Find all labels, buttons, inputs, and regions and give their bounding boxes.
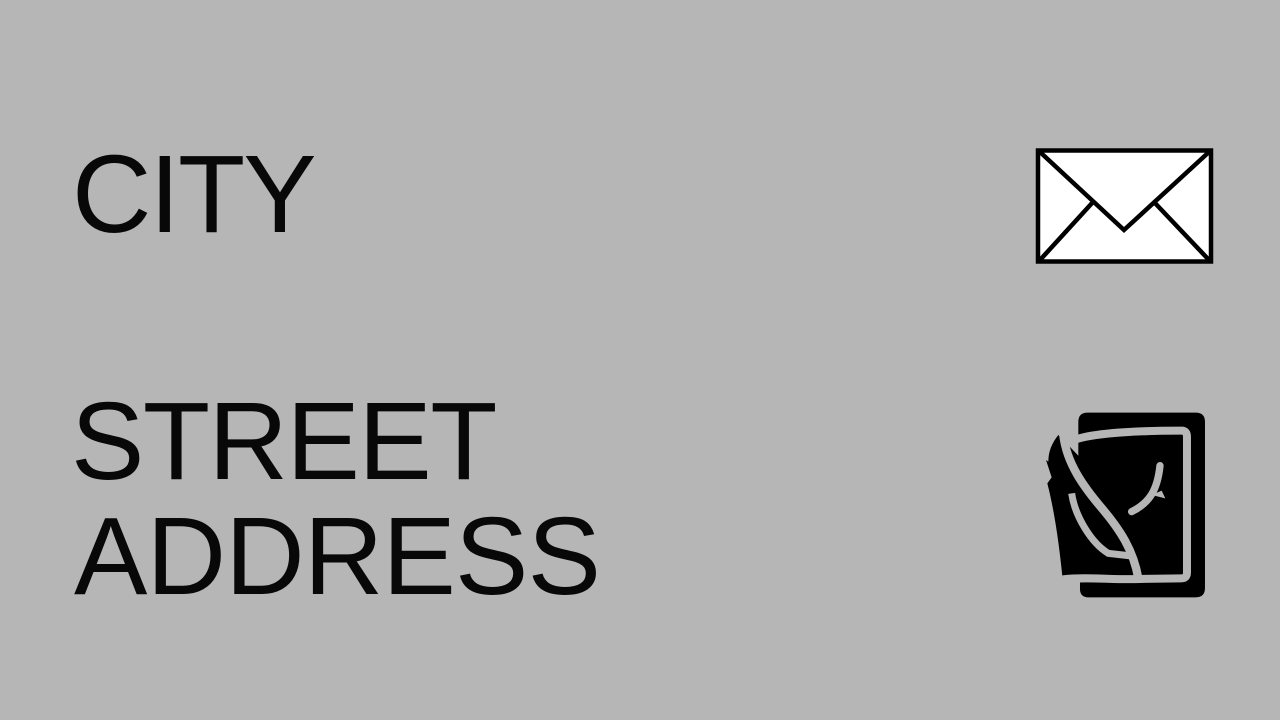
heading: street address: ADDRESS: [74, 495, 600, 618]
heading: street address: STREET: [71, 380, 496, 503]
heading: street address: [71, 380, 600, 618]
icon: phone with leaf: [1046, 413, 1205, 597]
icon: envelope: [1038, 150, 1211, 262]
heading: city: CITY: [72, 133, 315, 256]
